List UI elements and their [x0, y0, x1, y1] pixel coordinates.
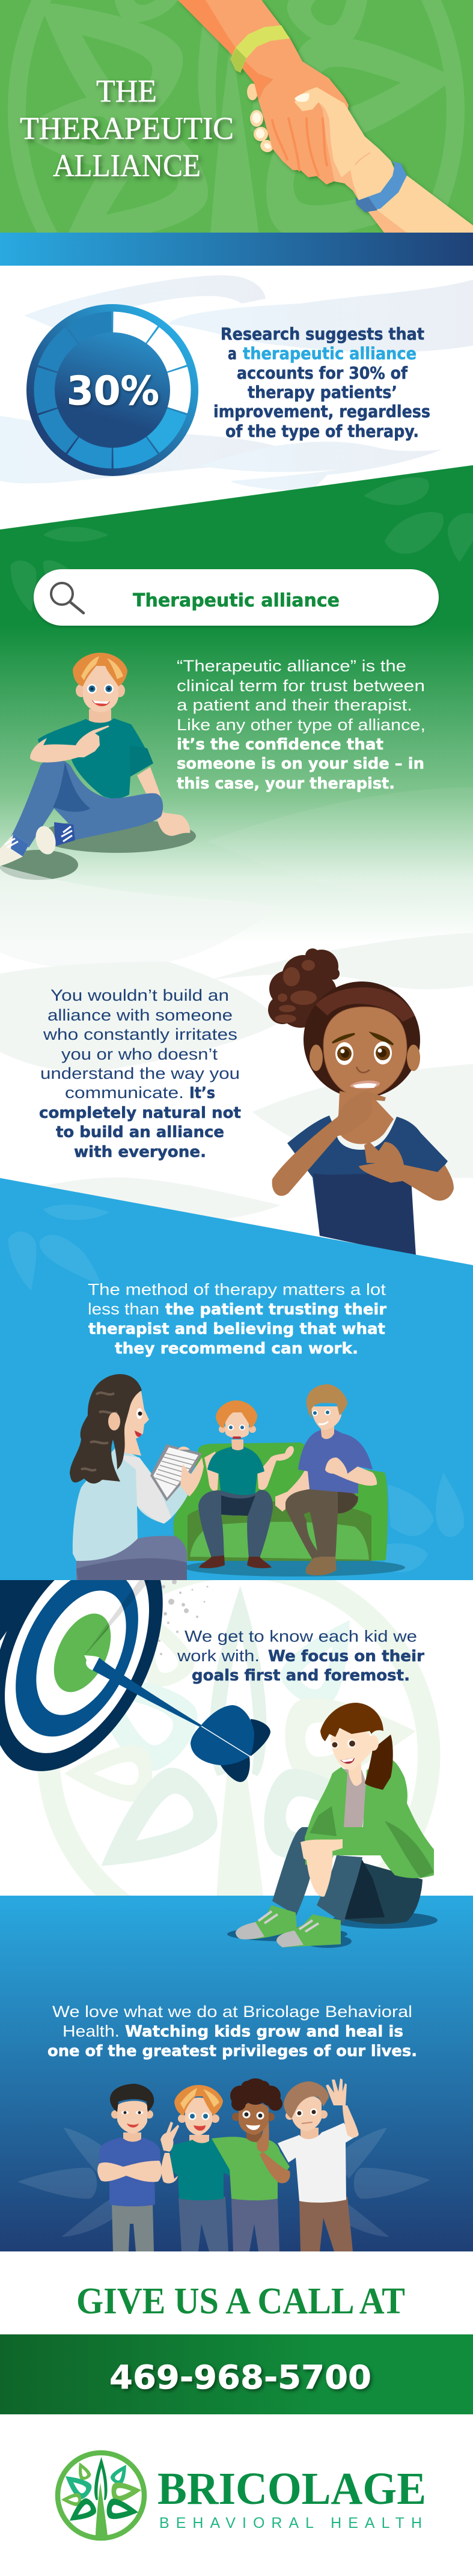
text: definition: “Therapeutic alliance” is the: [177, 657, 406, 675]
title: ALLIANCE: [53, 148, 201, 183]
gauge: 30 percent: 30%: [67, 368, 159, 414]
text: definition: this case, your therapist.: [177, 775, 395, 793]
kid 4: [278, 2078, 359, 2251]
text: natural not to build alliance: you or who doesn’t: [61, 1045, 218, 1063]
text: research statistic: [213, 325, 430, 441]
illustration: boy sitting and pointing: [0, 653, 196, 880]
illustration: handshake: [178, 0, 473, 233]
title: [20, 74, 234, 183]
text: research statistic: therapeutic alliance: [243, 344, 417, 363]
text: natural not to build alliance: alliance with someone: [47, 1006, 233, 1024]
text: natural not to build alliance: who constantly irritates: [43, 1025, 237, 1043]
text: research statistic: improvement, regardless: [213, 402, 430, 421]
text: goals: We focus on their: [268, 1647, 424, 1665]
text: goals: We get to know each kid we: [185, 1628, 417, 1646]
logo: Bricolage Behavioral Health: BRICOLAGE: [157, 2464, 426, 2514]
text: natural not to build alliance: It’s: [189, 1084, 215, 1102]
target: [0, 1580, 163, 1771]
text: natural not to build alliance: [39, 986, 241, 1161]
illustration: therapy session on sofa: [70, 1374, 405, 1581]
text: closing message: [47, 2003, 417, 2060]
text: method of therapy: The method of therapy matters a lot: [88, 1280, 386, 1298]
logo: Bricolage Behavioral Health: [58, 2453, 426, 2538]
text: goals: goals first and foremost.: [192, 1667, 410, 1685]
kid 1: [97, 2084, 162, 2251]
phone band: [0, 2334, 473, 2414]
text: definition: it’s the confidence that: [177, 736, 383, 754]
text: method of therapy: therapist and believing that what: [88, 1320, 385, 1338]
text: natural not to build alliance: You wouldn’t build an: [50, 986, 229, 1004]
illustration: group of four kids: [97, 2078, 359, 2251]
text: natural not to build alliance: understand the way you: [40, 1064, 240, 1082]
title: THE: [96, 74, 157, 109]
panel: goals: [0, 1580, 440, 1896]
text: research statistic: accounts for 30% of: [237, 364, 408, 383]
text: research statistic: therapy patients’: [248, 383, 397, 402]
boy in teal shirt: [198, 1400, 294, 1568]
text: goals: work with.: [177, 1647, 260, 1665]
text: method of therapy: they recommend can work.: [115, 1340, 358, 1358]
kid 2: [160, 2085, 230, 2251]
illustration: anxious girl biting nails: [268, 948, 454, 1256]
gauge: 30 percent: [26, 304, 198, 476]
panel: therapy method: [0, 1178, 473, 1581]
text: natural not to build alliance: to build an alliance: [56, 1123, 224, 1141]
man in purple shirt: [275, 1384, 377, 1575]
text: natural not to build alliance: communicate.: [65, 1084, 184, 1102]
panel: header: [0, 0, 473, 233]
text: natural not to build alliance: completely natural not: [39, 1104, 241, 1122]
logo: Bricolage Behavioral Health: BEHAVIORAL HEALTH: [159, 2515, 422, 2532]
text: closing message: Watching kids grow and heal is: [125, 2023, 403, 2041]
dart: [84, 1655, 270, 1782]
text: definition: clinical term for trust between: [177, 677, 425, 695]
text: definition: [177, 657, 426, 793]
text: closing message: one of the greatest privileges of our lives.: [47, 2042, 417, 2060]
panel: 30 percent statistic: [0, 266, 473, 536]
text: closing message: We love what we do at Bricolage Behavioral: [52, 2003, 412, 2021]
illustration: girl in green jacket: [227, 1703, 438, 1948]
text: method of therapy: less than: [88, 1300, 159, 1318]
text: closing message: Health.: [63, 2022, 120, 2040]
text: definition: a patient and their therapist.: [177, 696, 412, 714]
panel: green definition section: [0, 465, 473, 1178]
text: method of therapy: [88, 1280, 386, 1358]
text: natural not to build alliance: with everyone.: [74, 1143, 206, 1161]
text: goals: [177, 1628, 424, 1685]
search bar: Therapeutic alliance: [133, 590, 340, 611]
text: definition: someone is on your side – in: [177, 755, 424, 773]
therapist with clipboard: [70, 1374, 204, 1581]
text: research statistic: of the type of therapy.: [225, 422, 419, 441]
phone band: 469-968-5700: [109, 2358, 371, 2396]
text: research statistic: Research suggests that: [221, 325, 424, 344]
icon: magnifying glass: [51, 583, 84, 613]
sofa: [174, 1442, 388, 1561]
title: THERAPEUTIC: [20, 111, 234, 146]
text: definition: Like any other type of alliance,: [177, 716, 426, 734]
kid 3: [212, 2078, 290, 2251]
gradient divider bar: [0, 233, 473, 266]
text: research statistic: a: [228, 344, 237, 363]
panel: call to action: [0, 2251, 473, 2576]
text: method of therapy: the patient trusting their: [165, 1301, 386, 1319]
panel: natural alliances: [0, 865, 473, 1256]
search bar: [34, 569, 439, 626]
heading: give us a call: GIVE US A CALL AT: [76, 2281, 405, 2322]
panel: closing message: [0, 1896, 473, 2251]
